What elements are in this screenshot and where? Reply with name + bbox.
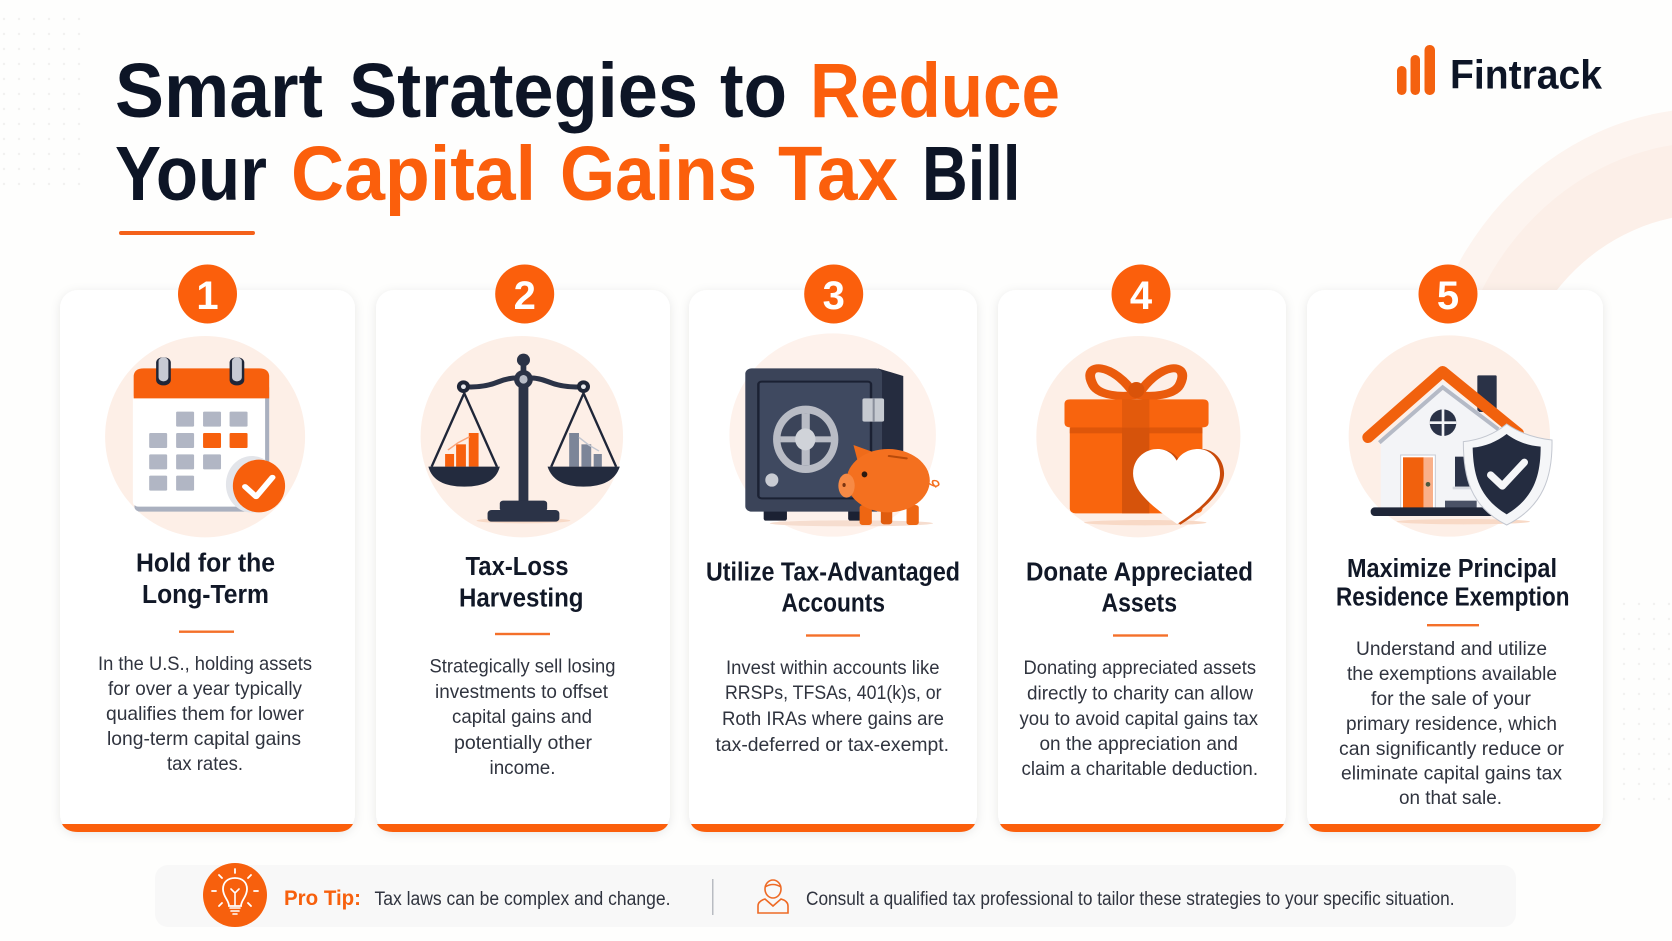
icon: gift box with heart <box>1036 336 1240 537</box>
body text <box>716 657 949 756</box>
heading: Maximize Principal <box>1347 555 1557 583</box>
heading: Donate Appreciated <box>1026 558 1253 586</box>
body text: income. <box>490 757 556 779</box>
icon: calendar with check <box>105 336 305 537</box>
card accent stripe <box>1309 824 1601 832</box>
body text: tax-deferred or tax-exempt. <box>716 734 949 756</box>
heading: Assets <box>1102 590 1177 618</box>
card accent stripe <box>691 824 975 832</box>
icon: safe with piggy bank <box>729 333 939 537</box>
body text: capital gains and <box>452 706 592 728</box>
body text: potentially other <box>454 732 593 754</box>
title <box>115 48 1060 217</box>
heading: Long-Term <box>142 581 269 609</box>
logo: Fintrack <box>1397 45 1602 98</box>
body text: tax rates. <box>167 753 243 775</box>
body text <box>1020 657 1258 780</box>
divider <box>495 633 550 635</box>
panel: card 4 Donate Appreciated Assets <box>998 264 1286 832</box>
icon: advisor person <box>758 880 788 913</box>
body text <box>98 653 312 775</box>
body text: for the sale of your <box>1371 688 1531 710</box>
bar background <box>155 865 1516 927</box>
logo: Fintrack: Fintrack <box>1450 52 1602 98</box>
card background <box>998 290 1286 832</box>
icon: house with shield <box>1349 335 1552 537</box>
body text: investments to offset <box>435 681 609 703</box>
body text: Understand and utilize <box>1356 638 1547 660</box>
title: Strategies <box>349 48 698 134</box>
title: Tax <box>778 131 898 217</box>
vertical divider <box>712 879 714 915</box>
body text: directly to charity can allow <box>1027 682 1254 704</box>
body text: In the U.S., holding assets <box>98 653 312 675</box>
title: Capital <box>291 131 536 217</box>
card accent stripe <box>1000 824 1284 832</box>
panel: card 3 Utilize Tax-Advantaged Accounts <box>689 264 977 832</box>
body text: RRSPs, TFSAs, 401(k)s, or <box>725 682 942 704</box>
panel: pro tip bar <box>155 863 1516 927</box>
panel: card 2 Tax-Loss Harvesting <box>376 264 670 832</box>
step number 3 <box>804 264 863 324</box>
consult text: Consult a qualified tax professional to tailor these strategies to your specific situation. <box>806 889 1454 910</box>
step number 4 <box>1112 264 1170 324</box>
pro tip text: Tax laws can be complex and change. <box>374 889 670 910</box>
body text: Roth IRAs where gains are <box>722 708 944 730</box>
heading <box>1026 558 1253 618</box>
step number 2 <box>495 264 554 324</box>
card accent stripe <box>62 824 353 832</box>
step number 5: 5 <box>1437 274 1459 318</box>
body text: eliminate capital gains tax <box>1341 762 1562 784</box>
title underline <box>119 231 255 235</box>
body text: on that sale. <box>1399 787 1502 809</box>
heading <box>459 553 584 612</box>
body text: qualifies them for lower <box>106 703 304 725</box>
body text <box>1339 638 1565 809</box>
body text: can significantly reduce or <box>1339 738 1565 760</box>
title: Bill <box>922 131 1020 217</box>
step number 2: 2 <box>514 274 536 318</box>
divider <box>806 634 860 637</box>
body text: long-term capital gains <box>107 728 301 750</box>
step number 1: 1 <box>196 274 219 318</box>
heading: Residence Exemption <box>1336 584 1570 612</box>
body text: the exemptions available <box>1347 663 1557 685</box>
card background <box>689 290 977 832</box>
panel: card 5 Maximize Principal Residence Exemption <box>1307 264 1603 832</box>
card background <box>60 290 355 832</box>
step number 3: 3 <box>823 274 845 318</box>
body text <box>430 656 616 779</box>
body text: you to avoid capital gains tax <box>1020 708 1258 730</box>
heading: Utilize Tax-Advantaged <box>706 558 960 586</box>
card background <box>1307 290 1603 832</box>
heading: Accounts <box>782 590 885 618</box>
body text: claim a charitable deduction. <box>1022 758 1258 780</box>
title: Gains <box>560 131 757 217</box>
divider <box>1427 624 1479 626</box>
title: Smart <box>115 48 323 134</box>
heading: Hold for the <box>136 550 275 578</box>
body text: Strategically sell losing <box>430 656 616 678</box>
divider <box>179 630 234 633</box>
title: to <box>720 48 787 134</box>
title: Reduce <box>810 48 1060 134</box>
heading: Harvesting <box>459 584 584 612</box>
body text: primary residence, which <box>1346 713 1557 735</box>
divider <box>1113 634 1168 637</box>
heading <box>1336 555 1570 612</box>
heading: Tax-Loss <box>466 553 568 581</box>
icon: balance scale with charts <box>421 336 623 537</box>
panel: card 1 Hold for the Long-Term <box>60 264 355 832</box>
title: Your <box>115 131 267 217</box>
heading <box>706 558 960 618</box>
icon: lightbulb <box>203 863 267 927</box>
step number 5 <box>1418 264 1478 324</box>
card background <box>376 290 670 832</box>
body text: on the appreciation and <box>1040 733 1238 755</box>
body text: Donating appreciated assets <box>1024 657 1256 679</box>
pro tip label: Pro Tip: <box>284 887 361 910</box>
body text: for over a year typically <box>108 678 302 700</box>
heading <box>136 550 275 609</box>
step number 1 <box>178 264 237 324</box>
card accent stripe <box>377 824 668 832</box>
step number 4: 4 <box>1130 274 1153 318</box>
body text: Invest within accounts like <box>726 657 940 679</box>
